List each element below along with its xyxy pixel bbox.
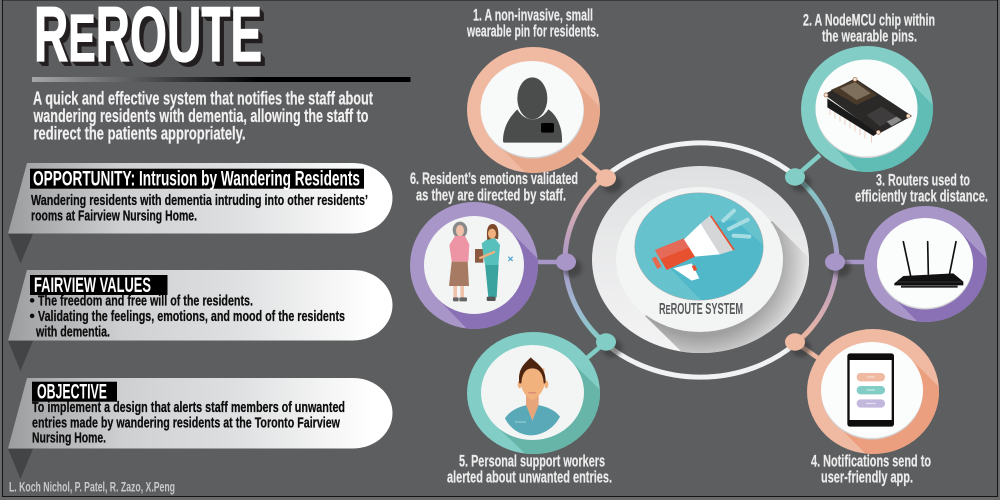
connector lines bbox=[538, 145, 865, 358]
circle 1: wearable pin bbox=[467, 47, 605, 177]
label 4: 4. Notifications send to bbox=[811, 453, 931, 471]
panel: opportunity: rooms at Fairview Nursing Home. bbox=[31, 208, 197, 224]
icon: router bbox=[894, 242, 963, 288]
icon: person with pin bbox=[503, 77, 562, 143]
panel: opportunity: Wandering residents with dementia intruding into other residents’ bbox=[31, 192, 368, 209]
panel: objective: To implement a design that alerts staff members of unwanted bbox=[32, 399, 345, 416]
circle 5: personal support worker bbox=[467, 332, 605, 458]
hub label: REROUTE SYSTEM bbox=[659, 301, 743, 318]
intro text: wandering residents with dementia, allowing the staff to bbox=[33, 106, 368, 126]
label 1 bbox=[466, 7, 599, 41]
panel: fairview values: FAIRVIEW VALUES bbox=[34, 274, 151, 297]
label 3 bbox=[855, 172, 988, 206]
label 6 bbox=[410, 170, 578, 205]
panel: fairview values: • bbox=[30, 308, 35, 325]
icon: chip board bbox=[824, 77, 912, 143]
circle 6: resident and staff bbox=[410, 202, 545, 332]
panel: fairview values: Validating the feelings, emotions, and mood of the residents bbox=[38, 308, 345, 325]
panel: objective bbox=[8, 378, 392, 479]
panel: objective: entries made by wandering residents at the Toronto Fairview bbox=[32, 415, 340, 432]
authors credit: L. Koch Nichol, P. Patel, R. Zazo, X.Peng bbox=[9, 480, 175, 495]
ring nodes bbox=[556, 168, 851, 357]
panel: objective: OBJECTIVE bbox=[37, 380, 107, 404]
label 5: alerted about unwanted entries. bbox=[447, 469, 612, 487]
icon: resident with nurse bbox=[449, 222, 513, 301]
icon: nurse portrait bbox=[505, 357, 560, 435]
label 4 bbox=[811, 453, 931, 487]
icon: smartphone bbox=[847, 353, 894, 427]
panel: opportunity: OPPORTUNITY: Intrusion by Wandering Residents bbox=[33, 168, 360, 190]
label 1: wearable pin for residents. bbox=[466, 23, 599, 41]
label 4: user-friendly app. bbox=[821, 469, 913, 487]
icon: megaphone bbox=[652, 211, 749, 281]
central hub: ReRoute system bbox=[592, 166, 815, 360]
label 2 bbox=[803, 12, 935, 46]
circle 3: router bbox=[864, 206, 987, 322]
intro text bbox=[33, 88, 373, 144]
panel: fairview values: • bbox=[30, 293, 35, 310]
intro text: redirect the patients appropriately. bbox=[34, 124, 246, 144]
panel: fairview values: The freedom and free will of the residents. bbox=[38, 293, 253, 310]
label 2: the wearable pins. bbox=[822, 28, 917, 46]
divider bar bbox=[32, 77, 410, 82]
label 5: 5. Personal support workers bbox=[459, 453, 605, 471]
circle 2: NodeMCU chip bbox=[801, 46, 940, 177]
label 6: as they are directed by staff. bbox=[416, 187, 566, 205]
label 1: 1. A non-invasive, small bbox=[473, 7, 593, 25]
label 6: 6. Resident’s emotions validated bbox=[410, 170, 578, 188]
panel: fairview values bbox=[8, 270, 392, 371]
label 5 bbox=[447, 453, 612, 487]
panel: objective: Nursing Home. bbox=[32, 430, 106, 447]
central ring bbox=[565, 143, 837, 377]
circle 4: phone app bbox=[807, 329, 945, 458]
panel: opportunity bbox=[8, 163, 392, 264]
panel: fairview values: with dementia. bbox=[35, 324, 110, 341]
intro text: A quick and effective system that notifies the staff about bbox=[33, 88, 373, 108]
